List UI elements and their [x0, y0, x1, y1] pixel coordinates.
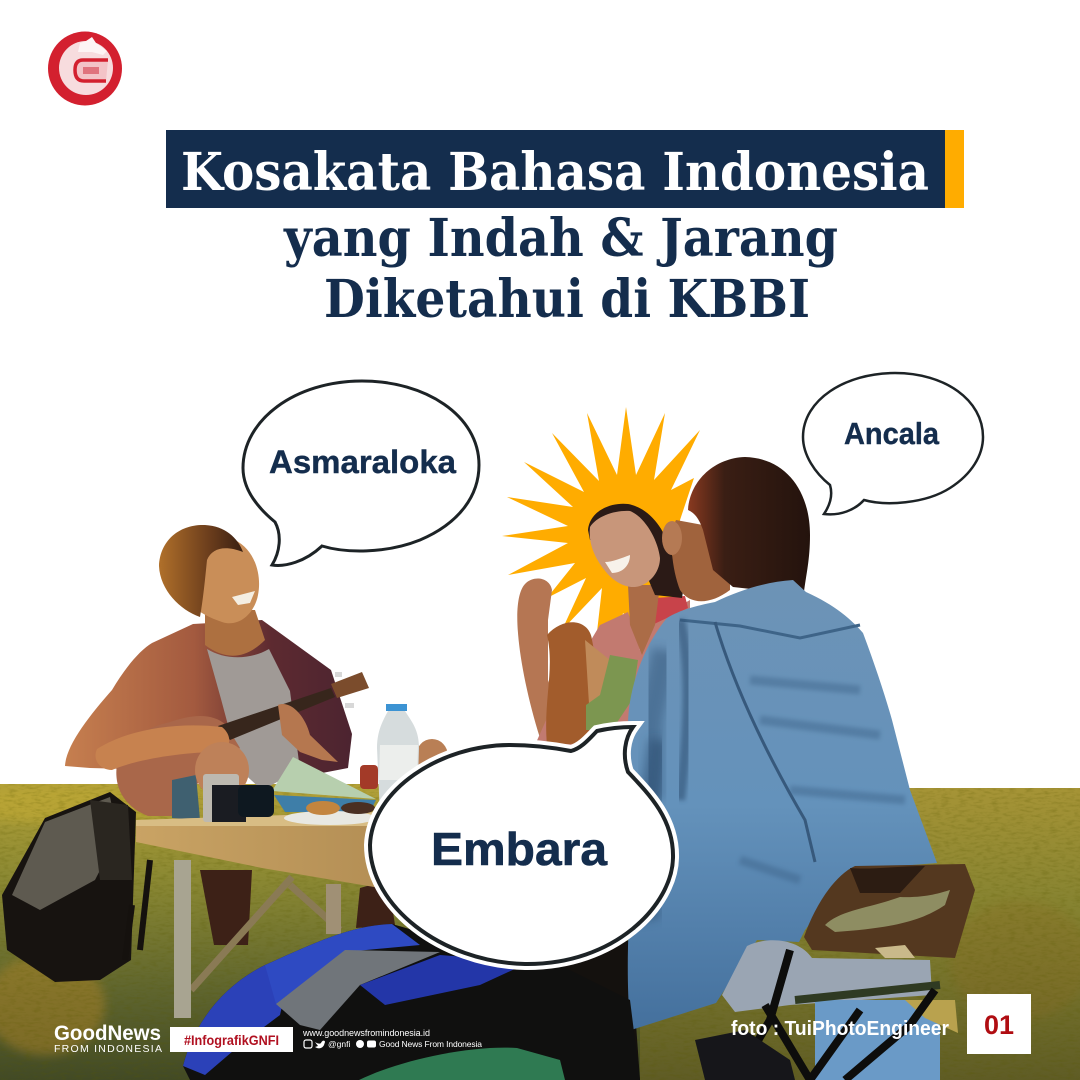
- baguettes: [546, 622, 600, 745]
- page number: [967, 994, 1031, 1054]
- sun burst: [502, 407, 700, 640]
- camp chair: [735, 864, 975, 1080]
- speech bubble: Embara: Embara: [431, 823, 607, 875]
- woman's neck and chest: [628, 585, 660, 655]
- water bottle: [377, 704, 419, 816]
- red mug: [360, 765, 378, 789]
- man playing ukulele: [65, 525, 448, 945]
- shoe: [695, 1030, 795, 1080]
- footer: website and social handles: www.goodnewsfromindonesia.id: [302, 1028, 430, 1038]
- photo credit: foto : TuiPhotoEngineer: [731, 1018, 949, 1040]
- logo: GNFI emblem: [48, 32, 122, 106]
- woman's hair: [688, 457, 810, 592]
- title line 2: yang Indah & Jarang: [283, 208, 838, 269]
- woman's mouth: [605, 555, 630, 573]
- man's t-shirt: [207, 649, 300, 790]
- jacket shading and seams: [640, 620, 905, 920]
- folding table brace: [191, 877, 340, 990]
- table legs: [174, 860, 191, 1018]
- footer: hashtag label: #InfografikGNFI: [184, 1033, 279, 1048]
- man's right knee: [416, 739, 448, 773]
- footer: website and social handles: [302, 1028, 482, 1049]
- man's shorts: [172, 775, 200, 820]
- man's neck: [205, 610, 265, 656]
- yellow card: [905, 1000, 958, 1033]
- title accent block: [945, 130, 964, 208]
- hand on cheek: [662, 521, 682, 555]
- woman's face: [590, 511, 660, 587]
- woman's raised arm: [517, 579, 570, 742]
- footer: GoodNews From Indonesia brand: [54, 1022, 162, 1055]
- page number: 01: [984, 1010, 1014, 1040]
- icon: instagram: [304, 1040, 312, 1048]
- jeans: [722, 940, 932, 1012]
- blue backpack in foreground: [183, 924, 640, 1080]
- speech bubble: Asmaraloka: Asmaraloka: [269, 444, 456, 480]
- speech bubble: Ancala: Ancala: [844, 416, 940, 451]
- woman seen from behind: [540, 457, 975, 1080]
- denim jacket: [628, 580, 937, 1030]
- man's knee: [195, 742, 249, 798]
- speech bubble: Ancala: [803, 373, 983, 514]
- footer: website and social handles: Good News From Indonesia: [379, 1039, 482, 1049]
- footer: GoodNews From Indonesia brand: GoodNews: [54, 1022, 161, 1045]
- man's head: [180, 540, 259, 623]
- title line 1: Kosakata Bahasa Indonesia: [181, 142, 929, 203]
- man's shirt: [65, 620, 352, 780]
- blue cooler box: [815, 1000, 940, 1080]
- camera: [203, 774, 274, 822]
- icon: twitter: [315, 1041, 325, 1048]
- man's arms: [95, 725, 229, 770]
- man's hair: [159, 525, 243, 617]
- table top: [136, 812, 380, 888]
- backpack on grass: [2, 792, 150, 982]
- woman's face profile: [672, 520, 730, 601]
- title: [166, 130, 964, 330]
- man's legs under table: [200, 870, 252, 945]
- plate with pastry: [284, 801, 376, 825]
- table with camping items: [136, 704, 419, 1018]
- footer: website and social handles: @gnfi: [328, 1039, 350, 1049]
- icon: youtube: [367, 1040, 376, 1048]
- speech bubble: Asmaraloka: [243, 381, 479, 565]
- plaid shirt: [535, 600, 690, 745]
- ukulele: [116, 672, 369, 816]
- footer: hashtag label: [170, 1027, 293, 1052]
- title line 3: Diketahui di KBBI: [324, 269, 810, 330]
- laughing woman: [517, 504, 690, 745]
- map: [272, 757, 376, 799]
- man's smile: [232, 591, 255, 605]
- footer: GoodNews From Indonesia brand: FROM INDONESIA: [54, 1043, 162, 1055]
- grass field: [0, 784, 1080, 1080]
- pineapple leaves: [586, 655, 638, 730]
- woman's hair: [588, 504, 684, 598]
- icon: facebook: [356, 1040, 364, 1048]
- title highlight bar: [166, 130, 945, 208]
- woman's legs and dark clothing: [540, 940, 640, 1080]
- speech bubble: Embara: [370, 727, 673, 964]
